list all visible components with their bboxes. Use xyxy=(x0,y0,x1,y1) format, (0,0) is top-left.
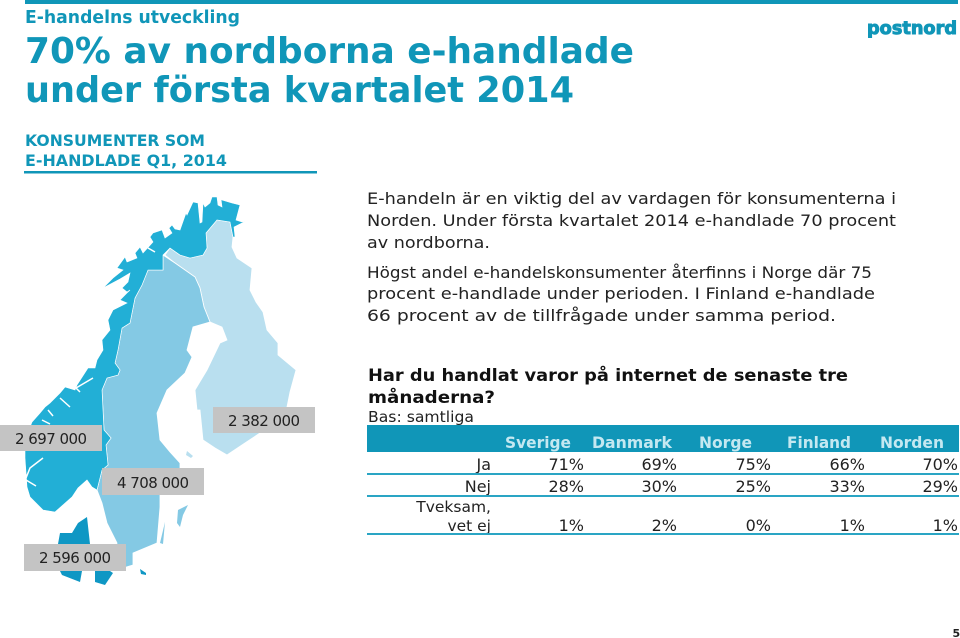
survey table xyxy=(367,425,959,535)
row: Nej: Nej xyxy=(465,477,491,496)
row: Tveksam, vet ej xyxy=(367,498,959,535)
row: Ja: 70% xyxy=(922,455,958,474)
row: Tveksam, vet ej: 2% xyxy=(652,516,677,535)
main title: 70% av nordborna e-handlade xyxy=(25,31,634,72)
islands xyxy=(140,569,146,575)
map region: Norway xyxy=(25,197,246,512)
row: Ja: 71% xyxy=(548,455,584,474)
row: Ja: 66% xyxy=(829,455,865,474)
row: Tveksam, vet ej: 1% xyxy=(840,516,865,535)
row: Tveksam, vet ej: 1% xyxy=(933,516,958,535)
row: Nej: 30% xyxy=(641,477,677,496)
kicker heading: E-handelns utveckling xyxy=(25,7,240,28)
intro text block: Högst andel e-handelskonsumenter återfinns i Norge där 75 xyxy=(367,263,872,282)
label: Norway xyxy=(0,425,102,451)
row: Nej: 29% xyxy=(922,477,958,496)
row: Tveksam, vet ej: 1% xyxy=(559,516,584,535)
label: Sweden: 4 708 000 xyxy=(117,474,189,492)
row: Tveksam, vet ej: 0% xyxy=(746,516,771,535)
label: Denmark: 2 596 000 xyxy=(39,549,111,567)
intro text block: av nordborna. xyxy=(367,233,490,252)
logo: postnord: postnord xyxy=(867,18,957,39)
row: Ja xyxy=(367,455,959,475)
row: Ja: Ja xyxy=(475,455,491,474)
map section heading: E-HANDLADE Q1, 2014 xyxy=(25,151,227,170)
row: Nej: 25% xyxy=(735,477,771,496)
table header: Sverige xyxy=(505,433,571,452)
row: Nej: 33% xyxy=(829,477,865,496)
label: Sweden xyxy=(102,468,204,495)
intro text block xyxy=(367,189,896,325)
row: Ja: 69% xyxy=(641,455,677,474)
table header: Norge xyxy=(699,433,752,452)
map region: Denmark xyxy=(58,517,113,585)
row: Nej: 28% xyxy=(548,477,584,496)
map of the Nordic countries xyxy=(25,197,296,585)
map region: Finland xyxy=(165,220,296,455)
main title: under första kvartalet 2014 xyxy=(25,70,574,111)
row: Ja: 75% xyxy=(735,455,771,474)
table heading xyxy=(368,364,848,426)
row: Tveksam, vet ej: vet ej xyxy=(447,517,491,535)
table header: Danmark xyxy=(592,433,672,452)
table header xyxy=(367,425,959,452)
label: Finland: 2 382 000 xyxy=(228,412,300,430)
map section heading: KONSUMENTER SOM xyxy=(25,131,205,150)
main title xyxy=(25,31,634,111)
intro text block: procent e-handlade under perioden. I Finland e-handlade xyxy=(367,284,875,303)
table heading: Bas: samtliga xyxy=(368,408,474,426)
label: Norway: 2 697 000 xyxy=(15,430,87,448)
label: Denmark xyxy=(24,544,126,571)
table heading: Har du handlat varor på internet de senaste tre xyxy=(368,364,848,386)
intro text block: 66 procent av de tillfrågade under samma period. xyxy=(367,306,836,325)
map section heading xyxy=(24,131,317,174)
label: Finland xyxy=(213,407,315,433)
table header: Finland xyxy=(787,433,851,452)
intro text block: E-handeln är en viktig del av vardagen för konsumenterna i xyxy=(367,189,896,208)
table header: Norden xyxy=(880,433,944,452)
table heading: månaderna? xyxy=(368,386,495,408)
fjord cuts xyxy=(26,216,172,486)
row: Tveksam, vet ej: Tveksam, xyxy=(415,498,491,516)
row: Nej xyxy=(367,477,959,497)
intro text block: Norden. Under första kvartalet 2014 e-handlade 70 procent xyxy=(367,211,896,230)
map region: Sweden xyxy=(97,255,210,571)
